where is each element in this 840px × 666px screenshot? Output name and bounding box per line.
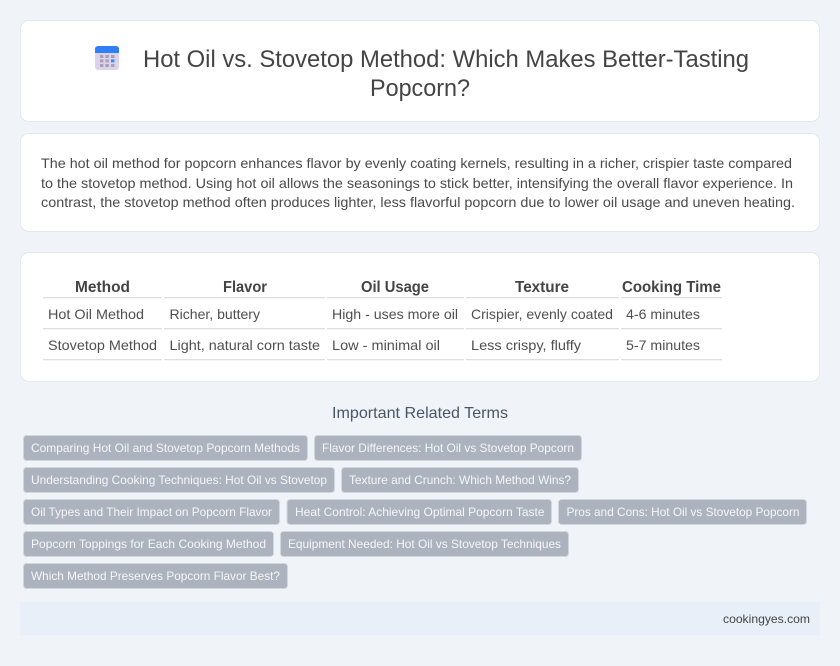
table header: Cooking Time — [622, 279, 721, 296]
table row: hot oil method: Richer, buttery — [170, 306, 260, 322]
title text: Hot Oil vs. Stovetop Method: Which Makes Better-Tasting — [143, 46, 749, 73]
title text — [143, 46, 749, 102]
table header: Flavor — [223, 279, 267, 296]
panel: comparison table — [20, 252, 820, 382]
tag: Which Method Preserves Popcorn Flavor Best? — [31, 569, 280, 583]
tag — [558, 500, 806, 524]
panel: summary paragraph: to the stovetop method. Using hot oil allows the seasonings to stick better, intensifying the overall flavor experience. In — [41, 175, 793, 191]
tag — [287, 500, 552, 524]
tag — [314, 436, 582, 460]
title text: Popcorn? — [370, 75, 470, 102]
table row: hot oil method: High - uses more oil — [332, 306, 458, 322]
tag: Texture and Crunch: Which Method Wins? — [349, 473, 571, 487]
table row: stovetop method: Low - minimal oil — [332, 337, 440, 353]
panel: summary paragraph: The hot oil method for popcorn enhances flavor by evenly coating kernels, resulting in a richer, crispier taste compared — [41, 155, 792, 171]
tag — [24, 436, 308, 460]
tag: Equipment Needed: Hot Oil vs Stovetop Techniques — [288, 537, 561, 551]
table row: hot oil method: 4-6 minutes — [626, 306, 700, 322]
tag: Heat Control: Achieving Optimal Popcorn Taste — [295, 505, 545, 519]
tag — [24, 532, 274, 556]
icon: calendar — [95, 46, 119, 70]
table row: hot oil method: Crispier, evenly coated — [471, 306, 613, 322]
table row: stovetop method: Less crispy, fluffy — [471, 337, 581, 353]
tag — [280, 532, 568, 556]
table header — [75, 279, 721, 296]
table row: stovetop method: Light, natural corn taste — [170, 337, 320, 353]
table header: Method — [75, 279, 130, 296]
tag — [342, 468, 578, 492]
tag: Popcorn Toppings for Each Cooking Method — [31, 537, 266, 551]
table header: Texture — [515, 279, 569, 296]
table row: hot oil method: Hot Oil Method — [48, 306, 144, 322]
panel: summary paragraph — [20, 134, 820, 232]
tag: Oil Types and Their Impact on Popcorn Flavor — [31, 505, 272, 519]
panel: title — [20, 20, 820, 122]
tag — [24, 468, 334, 492]
tag — [24, 564, 288, 588]
tag: Understanding Cooking Techniques: Hot Oil vs Stovetop — [31, 473, 327, 487]
related term tags — [24, 436, 806, 588]
table header: Oil Usage — [361, 279, 429, 296]
tag: Pros and Cons: Hot Oil vs Stovetop Popcorn — [566, 505, 800, 519]
tag: Flavor Differences: Hot Oil vs Stovetop Popcorn — [322, 441, 574, 455]
table row: stovetop method — [48, 337, 700, 353]
tag — [24, 500, 280, 524]
table row: stovetop method: 5-7 minutes — [626, 337, 700, 353]
heading: related terms: Important Related Terms — [332, 405, 508, 422]
footer — [20, 602, 820, 636]
footer: cookingyes.com — [723, 612, 810, 626]
tag: Comparing Hot Oil and Stovetop Popcorn Methods — [31, 441, 300, 455]
table row: hot oil method — [48, 306, 700, 322]
table row: stovetop method: Stovetop Method — [48, 337, 157, 353]
panel: summary paragraph: contrast, the stovetop method often produces lighter, less flavorful popcorn due to lower oil usage and uneven heating. — [41, 194, 795, 210]
